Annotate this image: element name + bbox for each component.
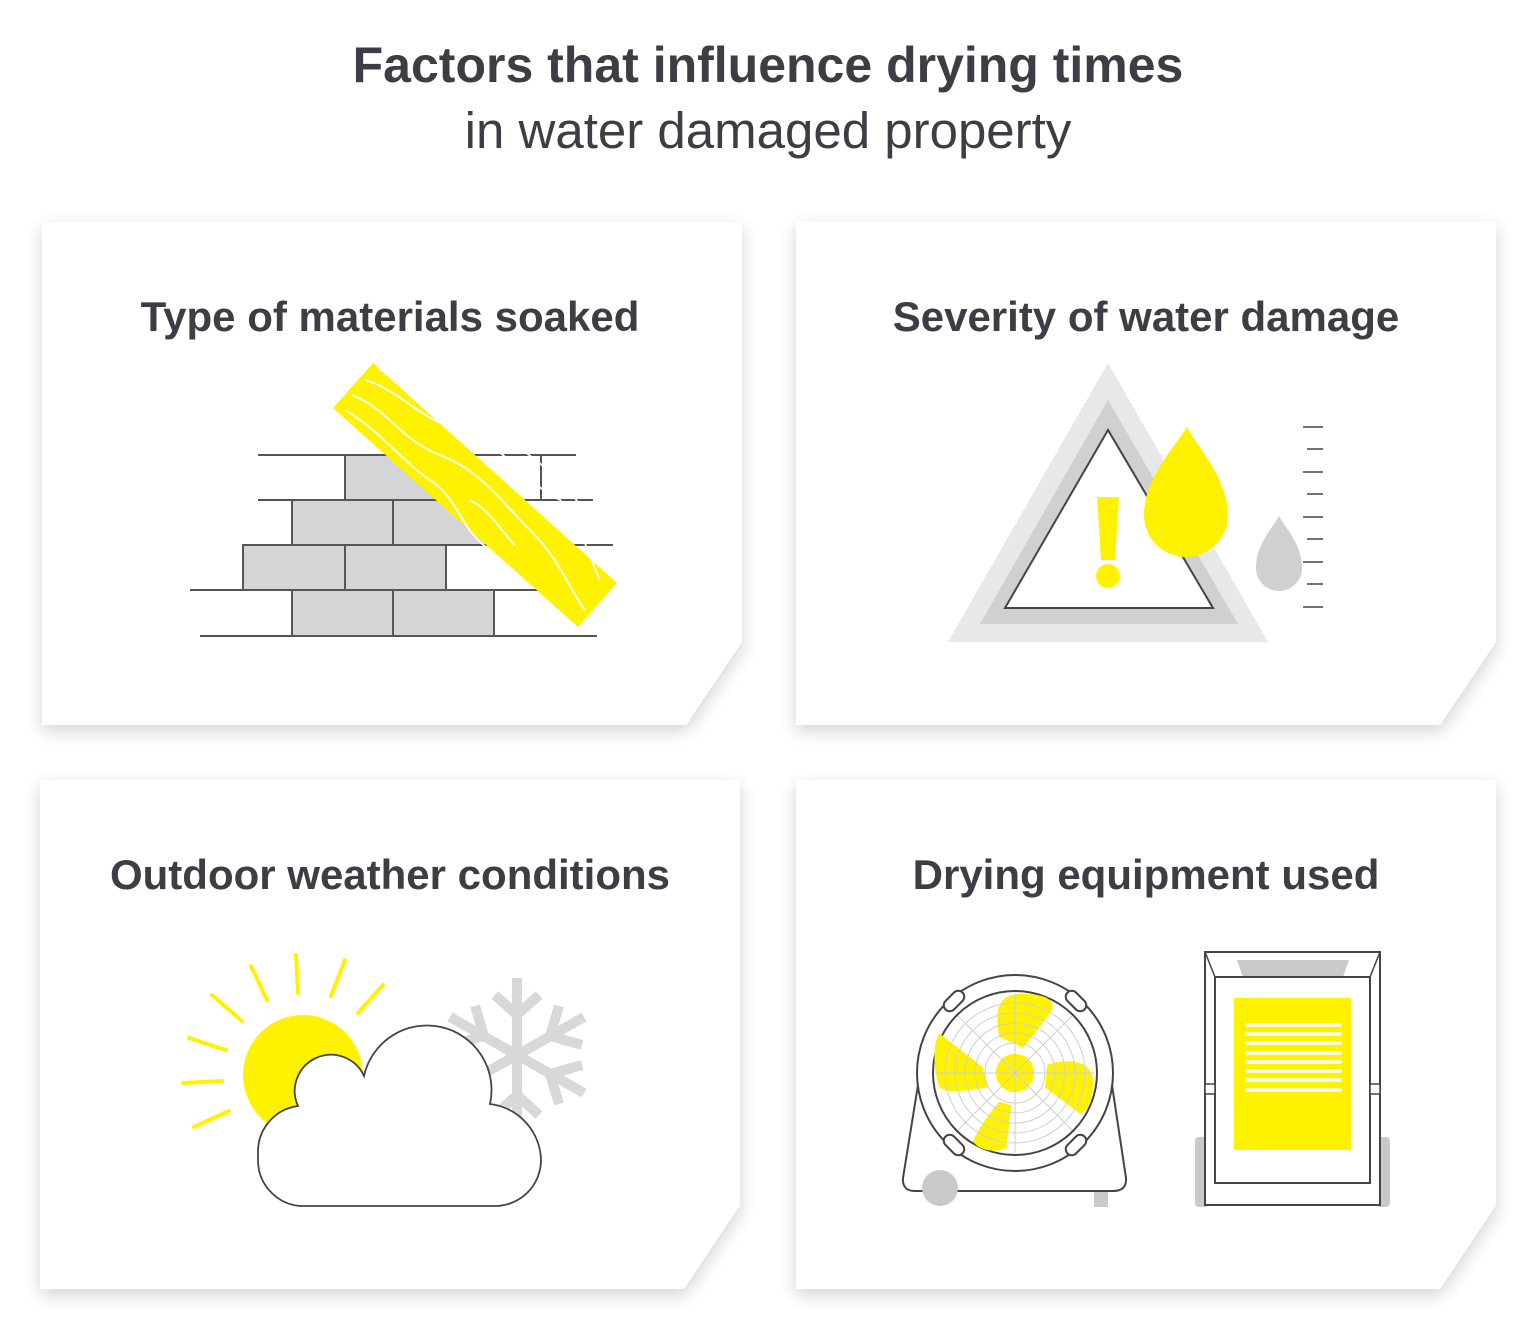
panel: outdoor weather — [40, 780, 740, 1289]
heading: type of materials soaked: Type of materials soaked — [141, 293, 639, 340]
icon: fan — [903, 975, 1126, 1207]
icon: bricks and plank — [190, 363, 617, 636]
icon: dehumidifier — [1195, 952, 1390, 1207]
panel: severity of water damage — [796, 222, 1496, 725]
title: Factors that influence drying times — [353, 37, 1183, 93]
heading: outdoor weather conditions: Outdoor weather conditions — [110, 851, 670, 898]
icon: warning triangle with drops — [948, 363, 1323, 642]
title: in water damaged property — [465, 102, 1072, 159]
panel: drying equipment — [796, 780, 1496, 1289]
heading: drying equipment used: Drying equipment used — [913, 851, 1379, 898]
panel: type of materials — [42, 222, 742, 725]
title — [353, 37, 1183, 159]
heading: severity of water damage: Severity of water damage — [893, 293, 1399, 340]
icon: sun cloud snowflake — [183, 955, 584, 1206]
